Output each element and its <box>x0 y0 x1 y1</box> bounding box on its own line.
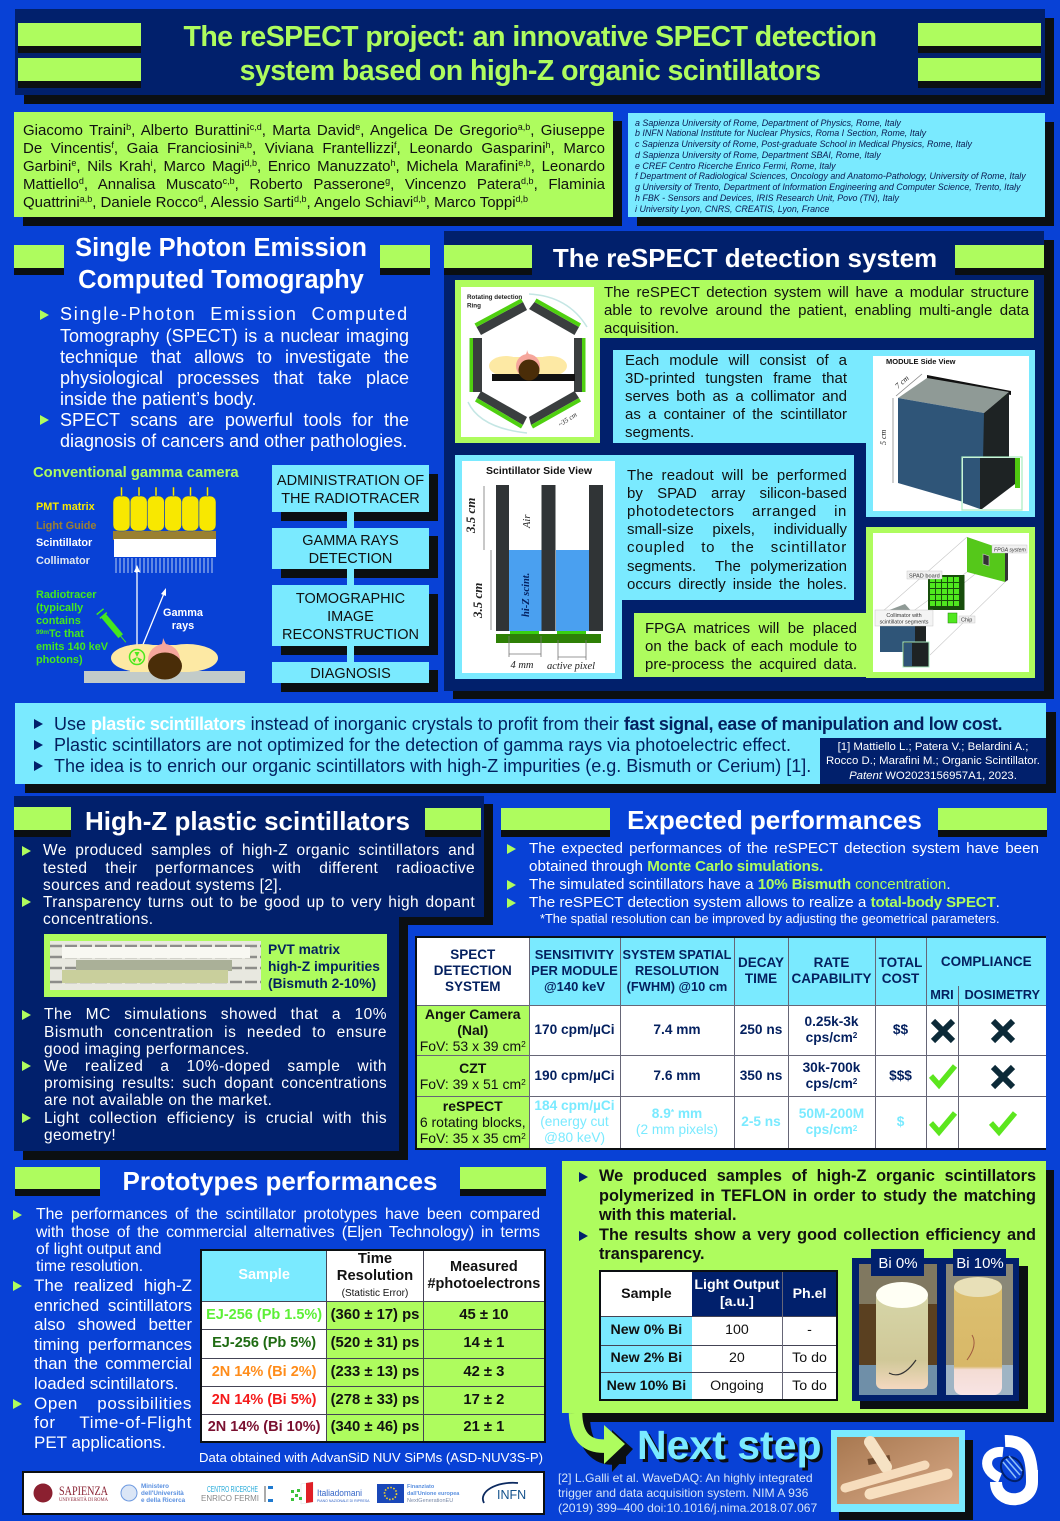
text: serves both as a collimator and <box>625 388 847 405</box>
table: detection system comparison: SYSTEM SPATIAL <box>622 947 732 962</box>
table: detection system comparison: FoV: 39 x 51 cm2 <box>420 1076 526 1092</box>
bullet list: The idea is to enrich our organic scintillators with high-Z impurities (e.g. Bismuth or Cerium) [1]. <box>54 756 811 776</box>
table: detection system comparison: $$$ <box>889 1068 912 1082</box>
logo: EU: Finanziato <box>407 1484 435 1490</box>
table: detection system comparison: MRI <box>930 987 954 1002</box>
text: small-size pixels, individually <box>627 521 847 538</box>
step 4 <box>272 662 429 683</box>
second bullets <box>22 1006 387 1144</box>
diagram: scintillator side view: Scintillator Side View <box>486 465 593 477</box>
diagram: gamma camera: Gamma <box>163 607 204 619</box>
table: detection system comparison: TOTAL <box>879 955 922 970</box>
SPECT bullet list <box>40 304 409 451</box>
PVT sample box <box>44 934 387 997</box>
table: TEFLON results: Sample <box>621 1286 672 1302</box>
first bullets: tested their performances with different radioactive <box>43 860 475 877</box>
table: prototype results: Sample <box>238 1267 290 1283</box>
second bullets: good imaging performances. <box>44 1041 250 1058</box>
table: detection system comparison: @140 keV <box>544 979 605 994</box>
text: The reSPECT detection system will have a modular structure <box>604 284 1029 300</box>
reference 2: [2] L.Galli et al. WaveDAQ: An highly integrated <box>558 1471 813 1485</box>
bullet list: Use plastic scintillators instead of inorganic crystals to profit from their fast signal, ease of manipulation and low cost. <box>54 714 1002 734</box>
flowchart: SPECT procedure <box>272 465 438 692</box>
second bullets: geometry! <box>44 1127 116 1144</box>
table: TEFLON results: Ongoing <box>710 1378 764 1394</box>
logo: Sapienza: SAPIENZA <box>59 1484 108 1498</box>
text <box>645 620 857 673</box>
table: prototype results: 42 ± 3 <box>463 1364 504 1380</box>
diagram: gamma camera: rays <box>172 620 194 632</box>
title banner <box>15 9 1054 104</box>
table: TEFLON results: New 2% Bi <box>610 1350 682 1366</box>
table: prototype results: EJ-256 (Pb 5%) <box>212 1335 316 1351</box>
diagram: scintillator side view: 3.5 cm <box>470 583 485 619</box>
table: prototype results: 2N 14% (Bi 10%) <box>208 1419 321 1435</box>
other bullets: PET applications. <box>34 1433 166 1452</box>
second bullets: Bismuth concentration is needed to ensure <box>44 1024 387 1041</box>
bullets: polymerized in TEFLON in order to study the matching <box>599 1187 1036 1205</box>
author names: Giacomo Trainib, Alberto Burattinic,d, Marta Davide, Angelica De Gregorioa,b, Giuseppe <box>23 122 605 138</box>
heading: Prototypes performances <box>122 1166 437 1196</box>
text: photodetectors arranged in <box>627 503 847 520</box>
heading: Expected performances <box>627 805 922 835</box>
step 3: TOMOGRAPHIC <box>296 590 405 606</box>
bullets: The results show a very good collection efficiency and <box>599 1226 1036 1244</box>
table: detection system comparison: 2-5 ns <box>741 1114 781 1129</box>
affiliations text: d Sapienza University of Rome, Department SBAI, Rome, Italy <box>635 150 881 160</box>
diagram: gamma camera: emits 140 keV <box>36 641 109 653</box>
affiliations text: e CREF Centro Ricerche Enrico Fermi, Rome, Italy <box>635 161 836 171</box>
table: detection system comparison: 0.25k-3k <box>804 1014 859 1029</box>
affiliations text: i University Lyon, CNRS, CREATIS, Lyon, France <box>635 204 829 214</box>
logo: EU: dall'Unione europea <box>407 1491 460 1497</box>
table: detection system comparison: SYSTEM <box>445 979 500 994</box>
diagram: scintillator side view: 4 mm <box>510 660 534 671</box>
logo: institute emblem <box>980 1434 1040 1506</box>
table: prototype results: Resolution <box>337 1268 413 1284</box>
footnote: *The spatial resolution can be improved by adjusting the geometrical parameters. <box>540 911 1000 926</box>
table: TEFLON results: [a.u.] <box>720 1294 754 1310</box>
diagram: gamma camera: Radiotracer <box>36 589 97 601</box>
diagram: gamma camera: Tc that <box>49 628 84 640</box>
table: TEFLON results: Light Output <box>694 1277 779 1293</box>
sample label <box>268 942 380 991</box>
arrow: next step <box>560 1410 650 1485</box>
first bullet: The performances of the scintillator prototypes have been compared <box>36 1206 540 1223</box>
affiliations text: c Sapienza University of Rome, Post-graduate School in Medical Physics, Rome, Italy <box>635 139 972 149</box>
affiliations text: h FBK - Sensors and Devices, IRIS Research Unit, Povo (TN), Italy <box>635 193 899 203</box>
table: detection system comparison: SENSITIVITY <box>535 947 614 962</box>
table: detection system comparison: DECAY <box>738 955 784 970</box>
logo: Sapienza <box>34 1484 109 1503</box>
heading: next step: Next step <box>637 1422 822 1468</box>
diagram: FPGA system: scintillator segments <box>880 620 929 626</box>
diagram: gamma camera: contains <box>36 615 81 627</box>
logo: Ministero: Ministero <box>141 1483 169 1490</box>
table: detection system comparison: 184 cpm/µCi <box>534 1098 615 1113</box>
table: detection system comparison: @80 keV) <box>544 1130 605 1145</box>
diagram: FPGA system: Collimator with <box>886 613 922 619</box>
table: detection system comparison: COMPLIANCE <box>941 954 1032 969</box>
other bullets: also showed better <box>34 1315 192 1334</box>
bullets: The simulated scintillators have a 10% Bismuth concentration. <box>529 876 951 893</box>
other bullets <box>13 1276 192 1452</box>
other bullets: enriched scintillators <box>34 1296 192 1315</box>
table: detection system comparison: 7.6 mm <box>653 1068 701 1082</box>
heading: High-Z plastic scintillators <box>85 806 410 836</box>
reference 1: Patent WO2023156957A1, 2023. <box>849 770 1017 782</box>
logo: Sapienza: UNIVERSITÀ DI ROMA <box>59 1497 109 1503</box>
authors panel <box>14 112 622 226</box>
step 4: DIAGNOSIS <box>310 666 391 682</box>
SPECT bullet list: SPECT scans are powerful tools for the <box>60 410 409 430</box>
diagram: rotating ring: ~35 cm <box>557 411 578 429</box>
author names: Mattiellod, Annalisa Muscatoc,b, Roberto Passeroneg, Vincenzo Paterad,b, Flaminia <box>23 176 605 192</box>
text: on the back of each module to <box>645 638 857 655</box>
first bullet: of light output and <box>36 1241 162 1258</box>
diagram: FPGA system: SPAD board <box>909 574 940 580</box>
sample label: PVT matrix <box>268 942 340 957</box>
table: detection system comparison: DOSIMETRY <box>964 987 1040 1002</box>
affiliations panel <box>628 113 1054 226</box>
diagram: gamma camera: PMT matrix <box>36 501 95 513</box>
table: detection system comparison: 170 cpm/µCi <box>534 1022 615 1037</box>
diagram: FPGA system <box>873 533 1029 672</box>
table: prototype results: (520 ± 31) ps <box>331 1335 419 1351</box>
second bullets: The MC simulations showed that a 10% <box>44 1006 387 1023</box>
text: segments. The polymerization <box>627 558 847 575</box>
second bullets: promising results: such dopant concentrations <box>44 1075 387 1092</box>
affiliations text <box>635 118 1026 214</box>
table: prototype results: 14 ± 1 <box>463 1335 504 1351</box>
table: detection system comparison: DETECTION <box>434 963 512 978</box>
bullets: with this material. <box>599 1206 737 1224</box>
table: detection system comparison: 7.4 mm <box>653 1022 701 1037</box>
reference 2: trigger and data acquisition system. NIM A 936 <box>558 1486 808 1500</box>
table: TEFLON results: 20 <box>729 1350 745 1366</box>
other bullets: Open possibilities <box>34 1394 192 1413</box>
first bullets: sources and readout systems [2]. <box>43 877 283 894</box>
table: detection system comparison: FoV: 35 x 35 cm2 <box>420 1130 526 1146</box>
text <box>625 352 847 441</box>
text: able to revolve around the patient, enabling multi-angle data <box>604 302 1029 319</box>
diagram: gamma camera: photons) <box>36 654 83 666</box>
panel: TEFLON samples <box>562 1161 1054 1422</box>
table: prototype results: (233 ± 13) ps <box>331 1364 419 1380</box>
diagram: FPGA system: Chip <box>961 618 972 624</box>
panel: readout description <box>455 455 854 679</box>
table: detection system comparison: 8.9* mm <box>652 1106 702 1121</box>
table: prototype results: 45 ± 10 <box>459 1306 509 1322</box>
logo: INFN: INFN <box>497 1488 526 1502</box>
title text: system based on high-Z organic scintillators <box>240 55 820 87</box>
bullet list <box>34 714 1002 776</box>
logo: Ministero: e della Ricerca <box>141 1497 186 1504</box>
step 2: DETECTION <box>309 550 392 566</box>
first bullet: with those of the commercial alternatives (Eljen Technology) in terms <box>36 1224 540 1241</box>
table: detection system comparison: cps/cm2 <box>806 1122 857 1137</box>
step 2: GAMMA RAYS <box>302 532 399 548</box>
first bullets: concentrations. <box>43 911 153 928</box>
photo labels: Bi 0% <box>878 1255 918 1272</box>
panel: high-Z plastic scintillators <box>14 796 493 1160</box>
title text <box>183 21 877 87</box>
first bullet: time resolution. <box>36 1258 143 1275</box>
other bullets: loaded scintillators. <box>34 1374 179 1393</box>
reference 1: [1] Mattiello L.; Patera V.; Belardini A.; <box>838 741 1028 753</box>
author names: De Vincentisf, Gaia Franciosinia,b, Viviana Frantellizzif, Leonardo Gasparinih, Marco <box>23 140 605 156</box>
first bullets: We produced samples of high-Z organic scintillators and <box>43 842 475 859</box>
table: detection system comparison: (2 mm pixels) <box>636 1122 718 1137</box>
diagram: FPGA system: FPGA system <box>994 548 1026 554</box>
diagram: gamma camera: Scintillator <box>36 537 93 549</box>
logo: INFN <box>483 1483 526 1503</box>
heading text: Single Photon Emission <box>75 234 367 262</box>
sample label: (Bismuth 2-10%) <box>268 976 376 991</box>
table: prototype results: 2N 14% (Bi 5%) <box>212 1392 316 1408</box>
table: prototype results: (340 ± 46) ps <box>331 1419 419 1435</box>
panel: expected performances <box>501 805 1047 926</box>
SPECT bullet list: physiological processes that take place <box>60 368 409 388</box>
photo: Bi 0% <box>859 1264 937 1395</box>
panel: module description <box>613 350 1035 517</box>
diagram: rotating ring <box>461 287 594 437</box>
logos panel <box>22 1471 545 1515</box>
table: detection system comparison: reSPECT <box>443 1098 503 1114</box>
table: detection system comparison: $$ <box>893 1022 908 1037</box>
heading: The reSPECT detection system <box>553 243 937 273</box>
other bullets: The realized high-Z <box>34 1276 192 1295</box>
logo: Italia domani: PIANO NAZIONALE DI RIPRESA <box>317 1499 370 1503</box>
heading text: Computed Tomography <box>78 266 364 294</box>
diagram: scintillator side view <box>462 461 615 673</box>
text: Each module will consist of a <box>625 352 847 368</box>
table: prototype results: #photoelectrons <box>427 1276 540 1292</box>
table: detection system comparison: Anger Camera <box>425 1006 521 1022</box>
diagram: scintillator side view: hi-Z scint. <box>521 573 532 617</box>
table: detection system comparison: 350 ns <box>740 1068 782 1082</box>
table: detection system comparison: TIME <box>745 971 777 986</box>
text: occurs directly inside the holes. <box>627 576 847 593</box>
table: detection system comparison: (NaI) <box>457 1022 488 1038</box>
logo: Italia domani: Italiadomani <box>317 1488 362 1498</box>
affiliations text: g University of Trento, Department of Information Engineering and Computer Science, Trento, Italy <box>635 182 1020 192</box>
table: detection system comparison: COST <box>882 971 919 986</box>
table: detection system comparison: 50M-200M <box>799 1106 864 1121</box>
logo: EU <box>377 1484 460 1504</box>
table: detection system comparison: 6 rotating blocks, <box>420 1114 526 1130</box>
step 1 <box>272 465 429 512</box>
step 3 <box>272 585 429 646</box>
table: prototype results: (278 ± 33) ps <box>331 1392 419 1408</box>
diagram: rotating ring: Ring <box>467 302 481 310</box>
author names: Garbinie, Nils Krahi, Marco Magid,b, Enrico Manuzzatoh, Michela Marafinie,b, Leonardo <box>23 158 605 174</box>
panel: SPECT heading <box>14 234 430 294</box>
step 2 <box>272 528 429 569</box>
diagram: gamma camera: (typically <box>36 602 83 614</box>
panel: FPGA description <box>634 527 1035 678</box>
table: TEFLON results: To do <box>792 1378 827 1394</box>
diagram: module side view: MODULE Side View <box>886 357 956 366</box>
text: by SPAD array silicon-based <box>627 485 847 502</box>
panel: prototypes performances <box>13 1166 546 1452</box>
table: TEFLON results: 100 <box>725 1322 749 1338</box>
text: coupled to the scintillator <box>627 539 847 556</box>
table: detection system comparison <box>415 936 1046 1150</box>
panel: sample photos <box>852 1249 1028 1409</box>
SPECT bullet list: inside the patient’s body. <box>60 389 256 409</box>
logo: EU: NextGenerationEU <box>407 1498 453 1504</box>
step 1: ADMINISTRATION OF <box>277 472 424 488</box>
table: prototype results: Measured <box>450 1259 518 1275</box>
table: detection system comparison: cps/cm2 <box>806 1030 857 1045</box>
logo: Centro Ricerche Enrico Fermi <box>201 1484 273 1503</box>
affiliations text: b INFN National Institute for Nuclear Physics, Roma I Section, Rome, Italy <box>635 128 926 138</box>
table: prototype results: EJ-256 (Pb 1.5%) <box>206 1306 322 1322</box>
diagram: scintillator side view: Air <box>522 514 533 529</box>
table: prototype results: Time <box>358 1251 392 1267</box>
table: detection system comparison: RATE <box>814 955 849 970</box>
table: prototype results: 17 ± 2 <box>463 1392 504 1408</box>
table: detection system comparison: $ <box>897 1114 904 1129</box>
table: detection system comparison: CZT <box>459 1060 486 1076</box>
text: as a container of the scintillator <box>625 406 847 423</box>
table note: Data obtained with AdvanSiD NUV SiPMs (ASD-NUV3S-P) <box>199 1450 543 1465</box>
table: TEFLON results: - <box>807 1322 812 1338</box>
text <box>627 466 847 593</box>
bullets <box>507 840 1039 911</box>
bullets: The expected performances of the reSPECT detection system have been <box>529 840 1039 857</box>
diagram: gamma camera <box>36 486 245 683</box>
heading: conventional gamma camera: Conventional gamma camera <box>33 465 239 481</box>
SPECT bullet list: Tomography (SPECT) is a nuclear imaging <box>60 326 409 346</box>
table: prototype results: (Statistic Error) <box>342 1288 408 1299</box>
sample photo <box>50 941 261 990</box>
table: prototype results: (360 ± 17) ps <box>331 1306 419 1322</box>
bullets: obtained through Monte Carlo simulations. <box>529 858 823 875</box>
author names <box>23 122 605 210</box>
first bullets <box>22 842 475 928</box>
SPECT bullet list: technique that allows to investigate the <box>60 347 409 367</box>
table: prototype results <box>200 1249 546 1443</box>
diagram: gamma camera: 99m <box>36 629 49 636</box>
other bullets: timing performances <box>34 1335 192 1354</box>
bullet list: Plastic scintillators are not optimized for the detection of gamma rays via photoelectric effect. <box>54 734 791 754</box>
photo: next step samples <box>831 1430 973 1520</box>
logo: Centro Ricerche Enrico Fermi: CENTRO RICERCHE <box>207 1484 258 1494</box>
affiliations text: a Sapienza University of Rome, Department of Physics, Rome, Italy <box>635 118 901 128</box>
table: detection system comparison: (FWHM) @10 cm <box>627 979 727 994</box>
title text: The reSPECT project: an innovative SPECT detection <box>183 21 877 53</box>
diagram: gamma camera: Collimator <box>36 555 91 567</box>
table: prototype results: 21 ± 1 <box>463 1419 504 1435</box>
sample label: high-Z impurities <box>268 959 380 974</box>
photo labels <box>878 1255 1004 1272</box>
bullets: transparency. <box>599 1245 705 1263</box>
table: detection system comparison: 250 ns <box>740 1022 782 1037</box>
table: detection system comparison: SPECT <box>450 947 495 962</box>
diagram: module side view: 7 cm <box>893 373 911 390</box>
text: FPGA matrices will be placed <box>645 620 857 636</box>
second bullets: are not available on the market. <box>44 1092 272 1109</box>
table: detection system comparison: CAPABILITY <box>792 971 872 986</box>
photo labels: Bi 10% <box>956 1255 1004 1272</box>
table: TEFLON results: New 0% Bi <box>610 1322 682 1338</box>
table: detection system comparison: 190 cpm/µCi <box>534 1068 615 1082</box>
table: detection system comparison: RESOLUTION <box>635 963 719 978</box>
table: detection system comparison: cps/cm2 <box>806 1076 857 1090</box>
photo: Bi 10% <box>946 1264 1013 1395</box>
table: prototype results: 2N 14% (Bi 2%) <box>212 1364 316 1380</box>
logo: Centro Ricerche Enrico Fermi: ENRICO FERMI <box>201 1494 259 1503</box>
panel: modular structure <box>455 280 1034 443</box>
step 1: THE RADIOTRACER <box>281 490 420 506</box>
SPECT bullet list: diagnosis of cancers and other pathologies. <box>60 431 407 451</box>
reference 1 <box>820 738 1046 784</box>
panel: plastic scintillators idea <box>15 703 1056 793</box>
diagram: rotating ring: Rotating detection <box>467 294 522 301</box>
text: The readout will be performed <box>627 466 847 484</box>
text: 3D-printed tungsten frame that <box>625 370 847 387</box>
table: detection system comparison: PER MODULE <box>531 963 618 978</box>
bullets <box>579 1167 1036 1263</box>
step 3: IMAGE <box>327 608 374 624</box>
table: TEFLON results <box>599 1270 838 1401</box>
first bullets: Transparency turns out to be good up to very high dopant <box>43 894 475 911</box>
bullets: We produced samples of high-Z organic scintillators <box>599 1167 1036 1185</box>
diagram: gamma camera: Light Guide <box>36 520 96 532</box>
other bullets: than the commercial <box>34 1354 192 1373</box>
diagram: module side view <box>873 356 1029 511</box>
logo: Italia domani <box>291 1482 370 1504</box>
table: TEFLON results: To do <box>792 1350 827 1366</box>
table: detection system comparison: 30k-700k <box>803 1060 860 1074</box>
table: detection system comparison: FoV: 53 x 39 cm2 <box>420 1038 526 1054</box>
text: acquisition. <box>604 320 679 337</box>
other bullets: for Time-of-Flight <box>34 1413 192 1432</box>
table: TEFLON results: Ph.el <box>793 1286 826 1302</box>
author names: Quattrinia,b, Daniele Roccod, Alessio Sartid,b, Angelo Schiavid,b, Marco Toppid,b <box>23 194 528 210</box>
text: segments. <box>625 424 694 441</box>
text: pre-process the acquired data. <box>645 656 857 673</box>
SPECT bullet list: Single-Photon Emission Computed <box>60 304 409 324</box>
logo: Ministero <box>121 1483 186 1504</box>
second bullets: We realized a 10%-doped sample with <box>44 1058 387 1075</box>
diagram: scintillator side view: 3.5 cm <box>463 498 478 534</box>
diagram: module side view: 5 cm <box>879 429 888 445</box>
heading text <box>75 234 367 294</box>
step 3: RECONSTRUCTION <box>282 626 419 642</box>
reference 2: (2019) 399–400 doi:10.1016/j.nima.2018.07.067 <box>558 1501 817 1515</box>
reference 2 <box>558 1471 817 1515</box>
affiliations text: f Department of Radiological Sciences, Oncology and Anatomo-Pathology, University of Rome, Italy <box>635 171 1026 181</box>
second bullets: Light collection efficiency is crucial with this <box>44 1110 387 1127</box>
diagram: scintillator side view: active pixel <box>547 661 595 672</box>
text <box>604 284 1029 337</box>
logo: Ministero: dell'Università <box>141 1490 184 1497</box>
panel: detection system <box>444 231 1054 699</box>
first bullet <box>13 1206 540 1275</box>
reference 1: Rocco D.; Marafini M.; Organic Scintillator. <box>826 755 1040 767</box>
table: detection system comparison: (energy cut <box>540 1114 609 1129</box>
table: TEFLON results: New 10% Bi <box>607 1378 686 1394</box>
bullets: The reSPECT detection system allows to realize a total-body SPECT. <box>529 894 1000 911</box>
